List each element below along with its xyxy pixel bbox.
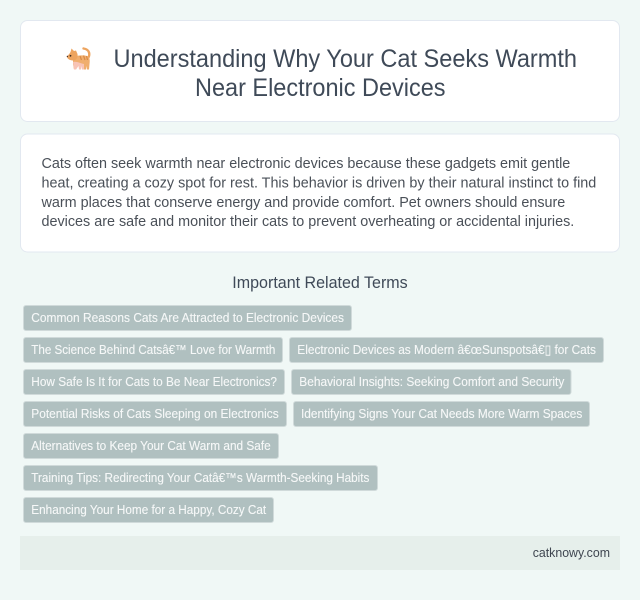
tag: risks [24,402,286,426]
footer [20,536,620,570]
panel: description [20,134,620,252]
tag: home: Enhancing Your Home for a Happy, Cozy Cat [31,502,267,517]
tag: risks: Potential Risks of Cats Sleeping on Electronics [31,406,279,421]
tag: common reasons [24,306,352,330]
tag: home [24,498,274,522]
title [114,45,577,102]
icon: cat [67,48,90,70]
tag: safety: How Safe Is It for Cats to Be Near Electronics? [31,374,277,389]
tag: behavioral insights [292,370,571,394]
text block: description: heat, creating a cozy spot for rest. This behavior is driven by their natural instinct to find [42,176,596,192]
tag: signs [294,402,590,426]
tag: science: The Science Behind Catsâ€™ Love for Warmth [31,342,275,357]
footer: catknowy.com [533,545,610,560]
tag: science [24,338,282,362]
tag: alternatives [24,434,278,458]
heading: related terms: Important Related Terms [232,274,408,292]
text block: description [41,156,596,230]
tag list: related terms [24,306,604,522]
text block: description: devices are safe and monitor their cats to prevent overheating or accidental injuries. [42,214,574,230]
tag: behavioral insights: Behavioral Insights: Seeking Comfort and Security [299,374,565,389]
title: Understanding Why Your Cat Seeks Warmth [114,45,577,73]
panel: title card [20,20,620,122]
tag: common reasons: Common Reasons Cats Are Attracted to Electronic Devices [31,310,344,325]
tag: signs: Identifying Signs Your Cat Needs More Warm Spaces [301,406,582,421]
text block: description: warm places that conserve energy and provide comfort. Pet owners should ensure [41,195,565,211]
tag: sunspots: Electronic Devices as Modern â€œSunspotsâ€▯ for Cats [297,342,596,357]
tag: sunspots [290,338,604,362]
tag: training [24,466,378,490]
text block: description: Cats often seek warmth near electronic devices because these gadgets emit gentle [42,156,570,172]
tag: safety [24,370,284,394]
tag: training: Training Tips: Redirecting Your Catâ€™s Warmth-Seeking Habits [31,470,369,485]
title: Near Electronic Devices [195,74,446,102]
tag: alternatives: Alternatives to Keep Your Cat Warm and Safe [31,438,271,453]
